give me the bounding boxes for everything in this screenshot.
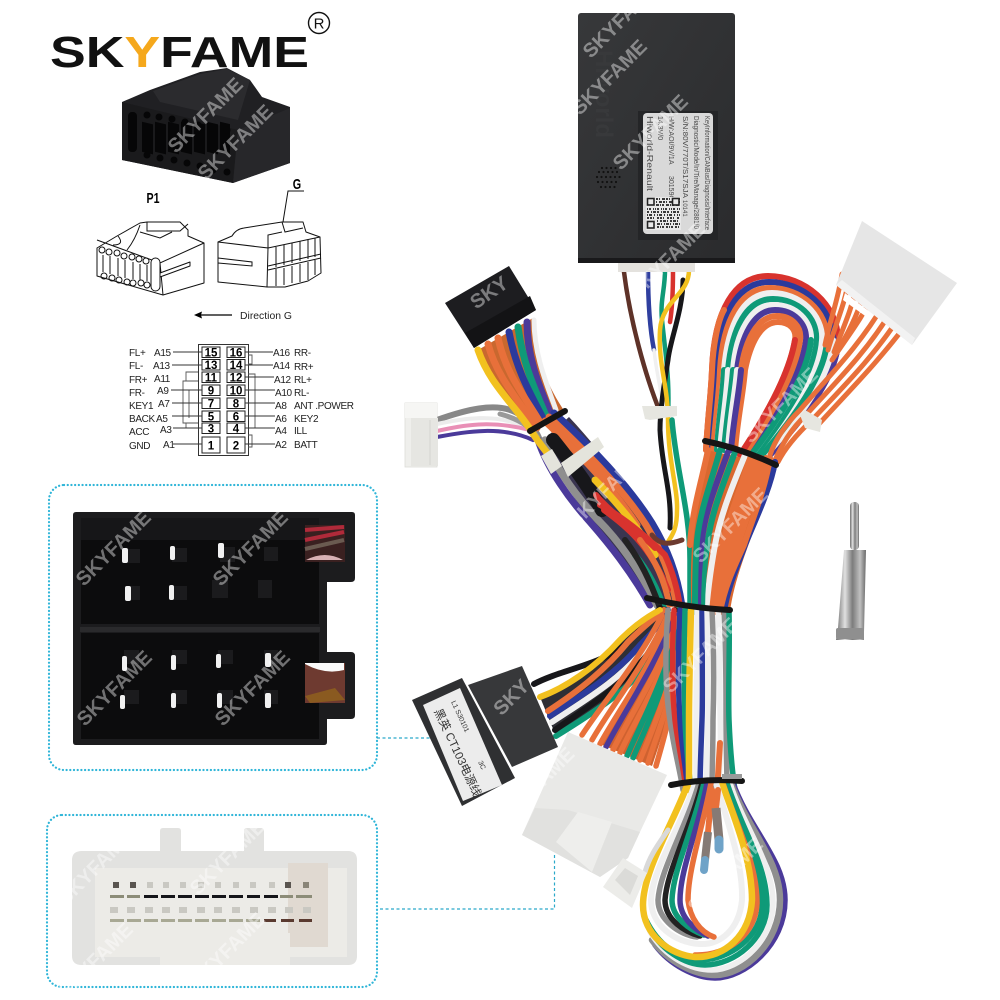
arrow: direction G: Direction G [240,311,292,322]
pinout diagram: A9 [157,386,169,397]
pinout diagram: RL+ [294,375,312,386]
product label: 30159C [667,176,674,201]
pinout diagram: 11 [205,372,218,384]
pinout diagram: 12 [230,372,242,384]
logo: SKYFAME [50,12,330,77]
watermarks over wires: SKYFAME [564,449,648,533]
pinout diagram: 15 [205,348,218,360]
pinout diagram: A16 [273,348,291,359]
small white side connector [405,403,438,467]
wires: main trunk [666,610,735,808]
pinout diagram: 8 [233,398,240,410]
pinout diagram: BATT [294,440,318,451]
watermarks over wires: SKYFAME [689,484,773,568]
pinout diagram: A14 [273,361,291,372]
pinout diagram: 9 [208,386,214,398]
black module with label: 黑英 CT103电源线 [431,706,484,799]
pinout diagram: A4 [275,426,287,437]
product label: Diagnostic/Mode/In/Tire/Manage/2881/0 [692,116,699,229]
pinout diagram: RR- [294,348,311,359]
pinout diagram: ANT .POWER [294,401,354,412]
product label: SKYFAME [626,219,710,303]
white plug at bottom: FAME [524,743,579,798]
wires: bottom loop [643,783,785,978]
black module with label: L1 S30101 [449,700,470,734]
pinout diagram: A2 [275,440,287,451]
pinout diagram: 7 [208,398,214,410]
wires: left connector bundle [478,318,685,608]
pinout diagram: A5 [156,414,168,425]
pinout diagram: KEY1 [129,401,154,412]
panel: black ISO connector: SKYFAME [209,507,293,591]
pinout diagram: GND [129,441,150,452]
pinout diagram: 10 [230,386,242,398]
wires: fan to black module [534,606,680,736]
pinout diagram: A11 [154,374,171,385]
white plug at bottom [522,732,667,908]
wires: orange fan from white plug [770,274,908,462]
panel: black ISO connector [49,485,377,770]
watermarks over wires: SKYFAME [739,364,823,448]
product label: 10141 [681,200,687,217]
product label: S/N:80V/770T/S17SJA [681,116,688,198]
black control box [412,0,866,918]
pinout diagram: A15 [154,348,172,359]
speaker holes [597,168,621,187]
panel: white 24-pin connector: SKYFAME [186,909,270,993]
pinout diagram: A3 [160,425,172,436]
wires: upper loop [706,276,838,455]
wires: orange fan to white plug [582,612,692,766]
pinout diagram: FL- [129,361,143,372]
pinout diagram: 4 [233,424,240,436]
logo: SKYFAME: R [314,16,325,32]
pinout diagram: BACK [129,414,156,425]
black module with label: 3C [476,760,486,771]
product label: Hiworld-Renault [645,116,654,192]
black module with label [412,666,558,806]
watermarks over wires: SKYFAME [659,614,743,698]
pinout diagram: FR+ [129,375,148,386]
panel: black ISO connector: SKYFAME [72,507,156,591]
leader line: white connector panel to plug [380,853,554,909]
product label: 14.3V/0 [656,116,663,140]
line drawing: P1 connector [97,222,204,295]
black control box: Hiworld [590,50,617,138]
pinout diagram: 16 [230,348,242,360]
wires: lower-right strand to main trunk [690,450,777,612]
wires: side connector lead [437,407,540,440]
pinout diagram: 3 [208,424,214,436]
black connector on left bundle: SKY [466,272,513,314]
pinout diagram: 13 [205,360,217,372]
pinout diagram: 14 [230,360,243,372]
pinout diagram: 6 [233,412,239,424]
QR code [646,197,681,230]
pinout diagram: A1 [163,440,175,451]
white plug at upper right [836,221,957,345]
black 16-pin connector photo: SKYFAME [164,74,248,158]
black connector on left bundle [445,266,536,348]
panel: white 24-pin connector: SKYFAME [186,816,270,900]
black 16-pin connector photo: SKYFAME [194,101,278,185]
pinout diagram: A8 [275,401,287,412]
cable ties [530,406,822,785]
product label: SKYFAME [568,36,652,120]
pinout diagram: 5 [208,412,215,424]
panel: black ISO connector: SKYFAME [73,647,157,731]
black 16-pin connector photo [122,68,290,185]
panel: black ISO connector: SKYFAME [211,647,295,731]
product label: SKYFAME [609,91,693,175]
pinout diagram: ILL [294,426,308,437]
black module with label: SKY [489,675,535,720]
pinout diagram: A10 [275,388,293,399]
pinout diagram: RL- [294,388,309,399]
pinout diagram: ACC [129,427,149,438]
label: P1: P1 [146,190,160,207]
pinout diagram: 2 [233,440,239,452]
product label: H/W:AOI/9V/1A [667,116,674,165]
pinout diagram: A13 [153,361,171,372]
antenna adapter [836,502,866,640]
product label [568,0,713,303]
watermarks over wires [564,364,823,918]
panel: white 24-pin connector [47,815,377,1000]
wires: control box cable [624,270,690,610]
product label: KeyInformation/CANBus/Diagnosis/Interface [703,116,710,230]
panel: white 24-pin connector: SKYFAME [54,826,138,910]
pinout diagram: RR+ [294,362,314,373]
leader line: ISO connector to module [377,737,430,739]
line drawing: G connector [218,191,321,287]
pinout diagram: A6 [275,414,287,425]
logo: SKYFAME: SK YFAME [50,28,309,77]
pinout diagram: FR- [129,388,145,399]
arrow: direction G [194,311,292,322]
pinout diagram: A7 [158,399,170,410]
pinout diagram [129,344,354,456]
pinout diagram: A12 [274,375,292,386]
pinout diagram: 1 [208,440,215,452]
label: G: G [293,175,301,192]
watermarks over wires: SKYFAME [684,834,768,918]
pinout diagram: KEY2 [294,414,319,425]
pinout diagram: FL+ [129,348,146,359]
